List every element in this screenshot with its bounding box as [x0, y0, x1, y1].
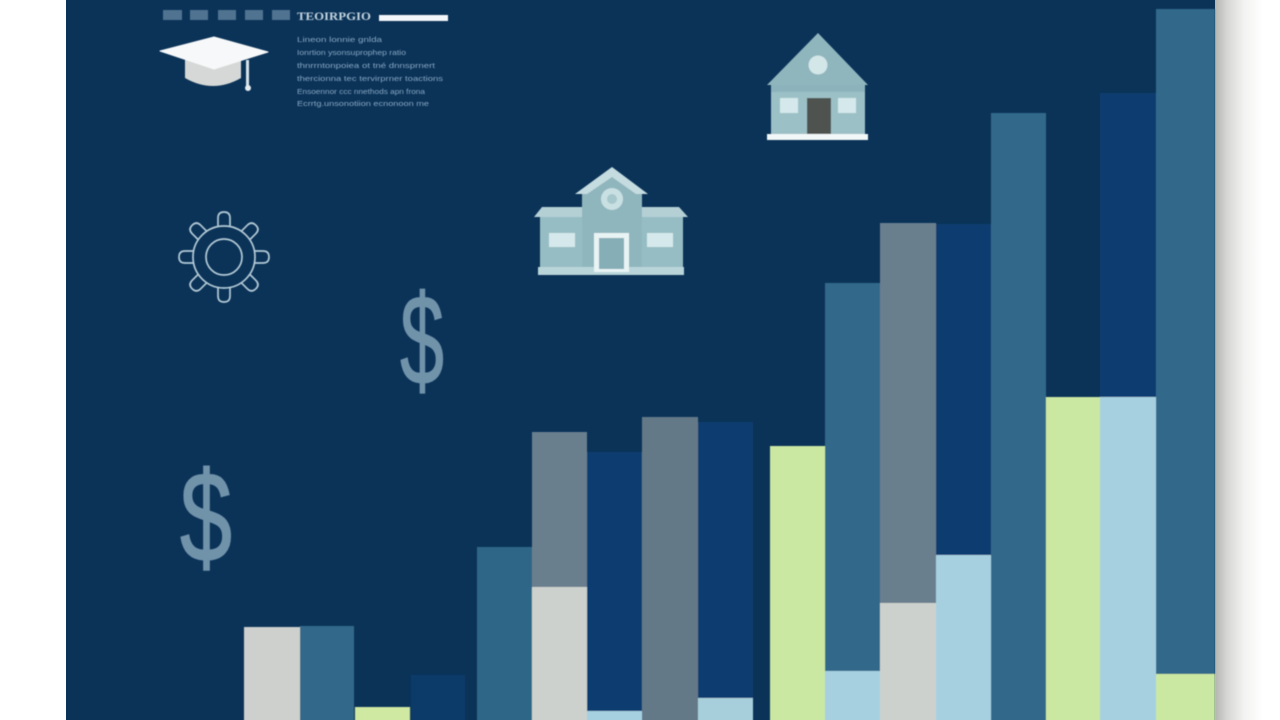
text block: description: Lineon lonnie gnlda [297, 35, 383, 44]
icon: school building [534, 167, 688, 275]
text block: description: Ionrtion ysonsuprophep ratio [297, 48, 406, 57]
text block: description [297, 35, 443, 108]
text block: description: thercionna tec tervirprner toactions [297, 74, 443, 83]
text block: description: Ensoennor ccc nnethods apn frona [297, 87, 426, 96]
icon: dollar sign upper: $ [400, 269, 444, 412]
header: tab row and title: TEOIRPGIO [297, 9, 371, 23]
bar chart [244, 9, 1215, 720]
icon: graduation cap [160, 37, 268, 91]
text block: description: thnrrntonpoiea ot tné dnnsprnert [297, 61, 436, 70]
header: tab row and title [163, 9, 448, 23]
icon: dollar sign lower: $ [180, 446, 232, 589]
icon: gear [179, 212, 269, 302]
icon: house [767, 33, 868, 140]
text block: description: Ecrrtg.unsonotiion ecnonoon me [297, 99, 429, 108]
